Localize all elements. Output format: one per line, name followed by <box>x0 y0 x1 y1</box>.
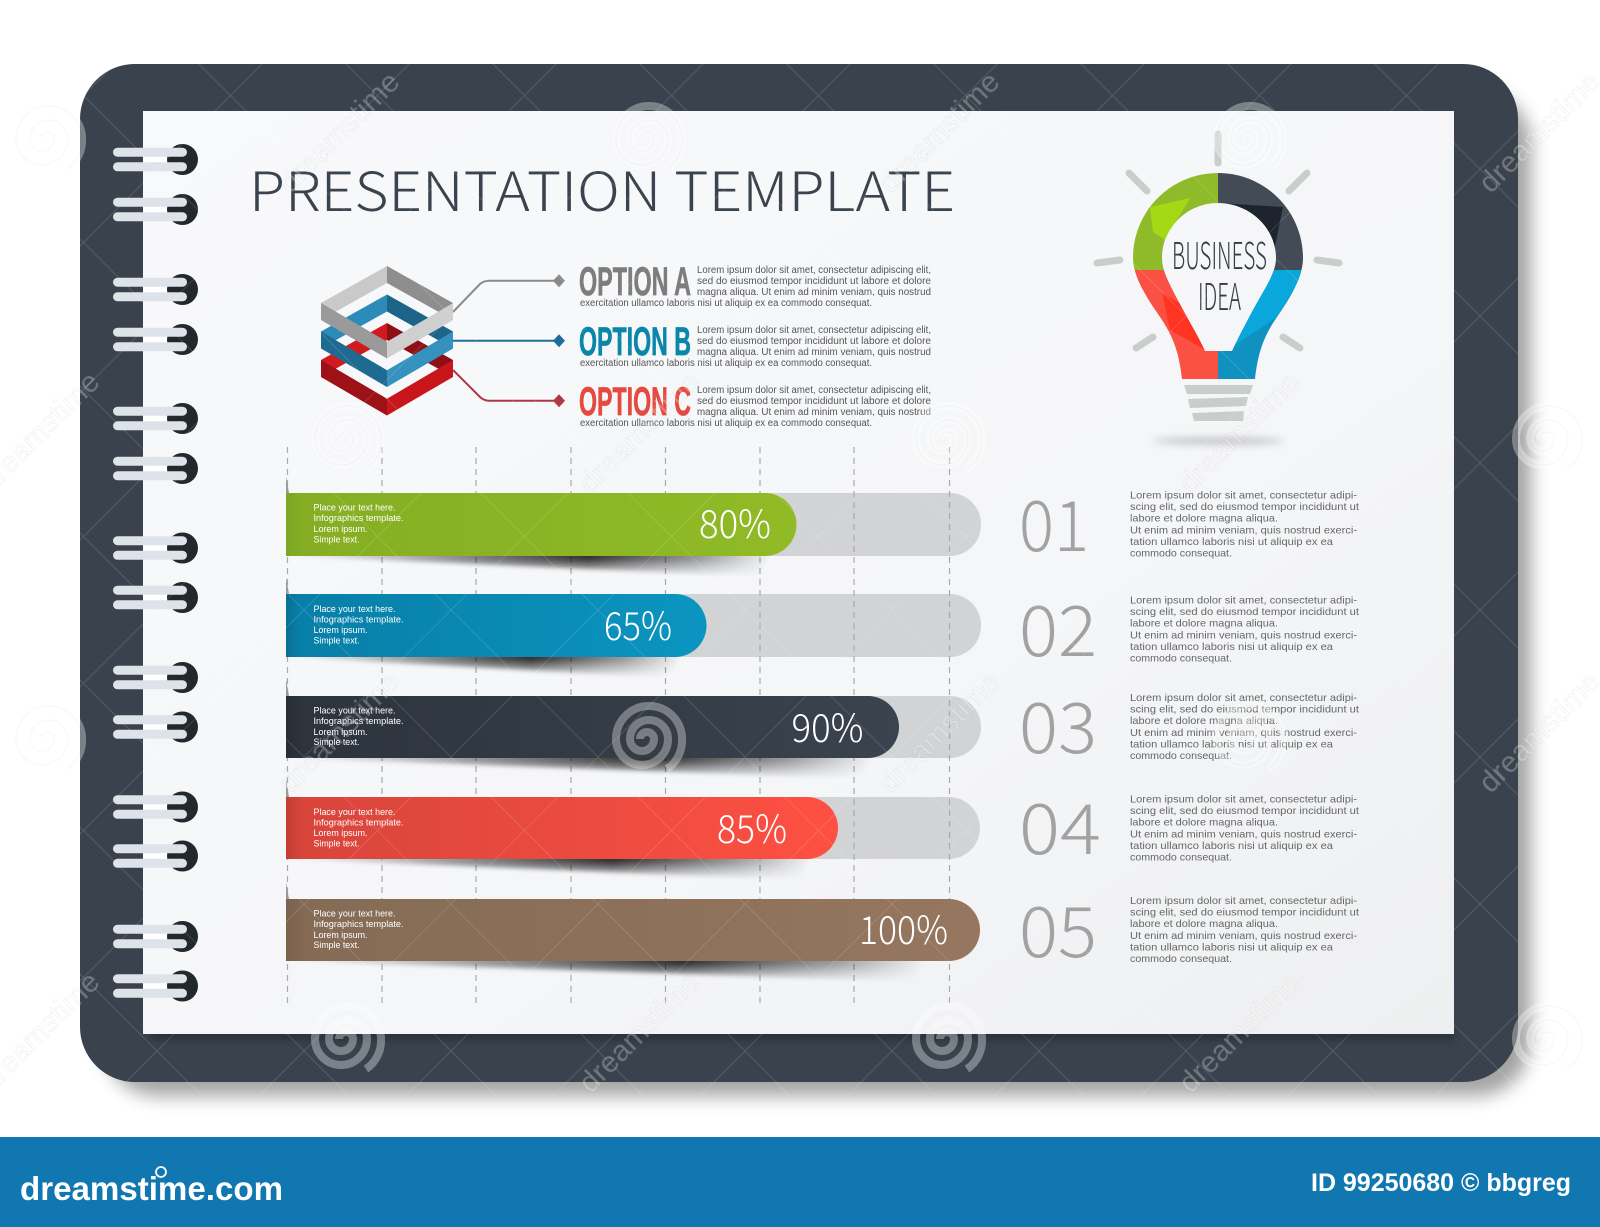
item 02: tation ullamco laboris nisi ut aliquip ex ea <box>1130 641 1333 653</box>
connector: option A <box>453 281 556 312</box>
item 05: 05 <box>1019 877 1097 978</box>
bar 2 caption: Simple text. <box>314 636 360 646</box>
option A text block: OPTION A <box>579 260 691 304</box>
bulb shadow <box>1152 438 1284 444</box>
item 05: tation ullamco laboris nisi ut aliquip ex ea <box>1130 942 1333 954</box>
bar 2 caption: Infographics template. <box>314 614 404 626</box>
footer image id: ID 99250680 © bbgreg <box>1311 1169 1571 1197</box>
watermark: diagonal text: dreamstime <box>272 665 406 799</box>
icon: light bulb <box>1097 134 1339 444</box>
bar 1 caption: Infographics template. <box>314 513 404 524</box>
item 03 <box>1019 673 1359 774</box>
watermark: diagonal text: dreamstime <box>872 65 1006 199</box>
notebook page <box>143 111 1454 1034</box>
watermark: diagonal text: dreamstime <box>872 665 1006 799</box>
item 05: scing elit, sed do eiusmod tempor incididunt ut <box>1130 906 1359 918</box>
connector: option C <box>453 370 556 401</box>
watermark: diagonal lines <box>80 64 1518 1096</box>
notebook cover <box>80 64 1518 1082</box>
option C text block: Lorem ipsum dolor sit amet, consectetur adipiscing elit, <box>697 385 931 396</box>
option A text block: magna aliqua. Ut enim ad minim veniam, quis nostrud <box>697 287 931 298</box>
item 05: labore et dolore magna aliqua. <box>1130 918 1278 930</box>
bulb rays <box>1097 134 1339 348</box>
item 03: scing elit, sed do eiusmod tempor incididunt ut <box>1130 704 1359 716</box>
option A text block: Lorem ipsum dolor sit amet, consectetur adipiscing elit, <box>697 265 931 276</box>
spiral binding rings <box>113 144 198 1002</box>
option B text block: magna aliqua. Ut enim ad minim veniam, quis nostrud <box>697 347 931 358</box>
option C text block: magna aliqua. Ut enim ad minim veniam, quis nostrud <box>697 407 931 418</box>
item 01: 01 <box>1019 471 1089 572</box>
footer logo: dreamstime.com <box>20 1170 283 1207</box>
item 01: Lorem ipsum dolor sit amet, consectetur adipi- <box>1130 490 1358 502</box>
bar 5: 100% <box>286 882 980 982</box>
option C text block: OPTION C <box>579 380 691 424</box>
item 05 <box>1019 877 1359 978</box>
item 04: scing elit, sed do eiusmod tempor incididunt ut <box>1130 805 1359 817</box>
bar 2 caption <box>314 604 404 646</box>
option A text block: sed do eiusmod tempor incididunt ut labore et dolore <box>697 276 931 287</box>
option B text block: sed do eiusmod tempor incididunt ut labore et dolore <box>697 336 931 347</box>
option B text block: exercitation ullamco laboris nisi ut aliquip ex ea commodo consequat. <box>580 358 872 369</box>
bar 4 caption: Place your text here. <box>314 807 396 818</box>
icon: layered isometric stack <box>321 266 565 416</box>
item 02: Lorem ipsum dolor sit amet, consectetur adipi- <box>1130 594 1358 606</box>
option A text block: exercitation ullamco laboris nisi ut aliquip ex ea commodo consequat. <box>580 298 872 309</box>
dashed grid lines <box>288 447 950 1005</box>
gray layer <box>321 266 453 358</box>
option B text block: OPTION B <box>579 320 691 364</box>
bar 1 caption: Place your text here. <box>314 502 396 514</box>
bar 4 caption <box>314 807 404 850</box>
item 02: Ut enim ad minim veniam, quis nostrud exerci- <box>1130 629 1358 641</box>
bar 3 caption <box>314 706 404 748</box>
item 03: tation ullamco laboris nisi ut aliquip ex ea <box>1130 738 1333 750</box>
bar 3 value: 90% <box>792 698 864 754</box>
option C text block: exercitation ullamco laboris nisi ut aliquip ex ea commodo consequat. <box>580 418 872 429</box>
bulb label: BUSINESS <box>1172 226 1267 280</box>
watermark: faint spiral edges <box>16 106 1582 1069</box>
footer band <box>0 1137 1600 1227</box>
item 01: commodo consequat. <box>1130 548 1232 560</box>
bar 4: 85% <box>286 780 838 880</box>
bar tracks <box>600 493 981 859</box>
watermark: diagonal text: dreamstime <box>1172 365 1306 499</box>
item 04 <box>1019 774 1359 875</box>
blue layer <box>321 294 453 387</box>
item 02: 02 <box>1019 576 1097 677</box>
bulb screw base <box>1184 385 1253 421</box>
title: PRESENTATION TEMPLATE <box>249 148 955 227</box>
watermark: diagonal text: dreamstime <box>272 65 406 199</box>
bar 5 caption: Place your text here. <box>314 908 396 920</box>
item 02: labore et dolore magna aliqua. <box>1130 618 1278 630</box>
red layer <box>321 323 453 416</box>
connector: option B <box>453 340 556 342</box>
item 03: commodo consequat. <box>1130 750 1232 762</box>
watermark: diagonal text: dreamstime <box>1172 965 1306 1099</box>
bar 2: 65% <box>286 577 707 678</box>
item 04: labore et dolore magna aliqua. <box>1130 817 1278 829</box>
item 01 <box>1019 471 1359 572</box>
bar 5 value: 100% <box>859 900 948 956</box>
bar 4 caption: Lorem ipsum. <box>314 828 368 839</box>
item 04: commodo consequat. <box>1130 852 1232 864</box>
bar 3 caption: Lorem ipsum. <box>314 727 368 738</box>
item 05: commodo consequat. <box>1130 953 1232 965</box>
notebook shadow <box>103 90 1531 1096</box>
page shadow <box>150 1030 1454 1040</box>
bulb glass segments <box>1133 173 1303 379</box>
bar 4 caption: Infographics template. <box>314 818 404 828</box>
item 02 <box>1019 576 1359 677</box>
bar 3 caption: Place your text here. <box>314 706 396 716</box>
item 05: Ut enim ad minim veniam, quis nostrud exerci- <box>1130 930 1358 942</box>
item 03: Lorem ipsum dolor sit amet, consectetur adipi- <box>1130 692 1358 704</box>
option C text block: sed do eiusmod tempor incididunt ut labore et dolore <box>697 396 931 407</box>
item 01: tation ullamco laboris nisi ut aliquip ex ea <box>1130 536 1333 548</box>
bar 4 value: 85% <box>717 799 787 855</box>
bar 2 value: 65% <box>604 596 672 652</box>
item 03: Ut enim ad minim veniam, quis nostrud exerci- <box>1130 727 1358 739</box>
item 02: commodo consequat. <box>1130 653 1232 665</box>
bar 1 value: 80% <box>699 494 771 550</box>
watermark: diagonal text: dreamstime <box>572 965 706 1099</box>
item 01: scing elit, sed do eiusmod tempor incididunt ut <box>1130 501 1359 513</box>
icon: light bulb: IDEA <box>1198 267 1241 321</box>
option B text block <box>579 320 931 369</box>
item 02: scing elit, sed do eiusmod tempor incididunt ut <box>1130 606 1359 618</box>
watermark: diagonal text: dreamstime <box>572 365 706 499</box>
bar 1: 80% <box>286 476 796 577</box>
item 01: Ut enim ad minim veniam, quis nostrud exerci- <box>1130 524 1358 536</box>
item 04: Lorem ipsum dolor sit amet, consectetur adipi- <box>1130 794 1358 806</box>
bar 3: 90% <box>286 679 899 779</box>
bar 1 caption: Lorem ipsum. <box>314 524 368 535</box>
bar 5 caption: Simple text. <box>314 940 360 951</box>
item 03: 03 <box>1019 673 1097 774</box>
bar 3 caption: Simple text. <box>314 737 360 748</box>
footer logo spiral <box>156 1167 166 1177</box>
bar 2 caption: Lorem ipsum. <box>314 625 368 636</box>
bar 1 caption <box>314 502 404 546</box>
bar 5 caption: Infographics template. <box>314 919 404 930</box>
option C text block <box>579 380 931 429</box>
item 05: Lorem ipsum dolor sit amet, consectetur adipi- <box>1130 895 1358 907</box>
item 04: tation ullamco laboris nisi ut aliquip ex ea <box>1130 840 1333 852</box>
item 04: 04 <box>1019 774 1101 875</box>
bar 1 caption: Simple text. <box>314 534 360 546</box>
watermark: spirals <box>16 106 1582 1069</box>
option B text block: Lorem ipsum dolor sit amet, consectetur adipiscing elit, <box>697 325 931 336</box>
bar 2 caption: Place your text here. <box>314 604 396 615</box>
bar 5 caption: Lorem ipsum. <box>314 930 368 941</box>
bar 3 caption: Infographics template. <box>314 716 404 727</box>
item 03: labore et dolore magna aliqua. <box>1130 715 1278 727</box>
item 04: Ut enim ad minim veniam, quis nostrud exerci- <box>1130 828 1358 840</box>
option A text block <box>579 260 931 309</box>
bar 5 caption <box>314 908 404 951</box>
bar 4 caption: Simple text. <box>314 838 360 850</box>
item 01: labore et dolore magna aliqua. <box>1130 513 1278 525</box>
